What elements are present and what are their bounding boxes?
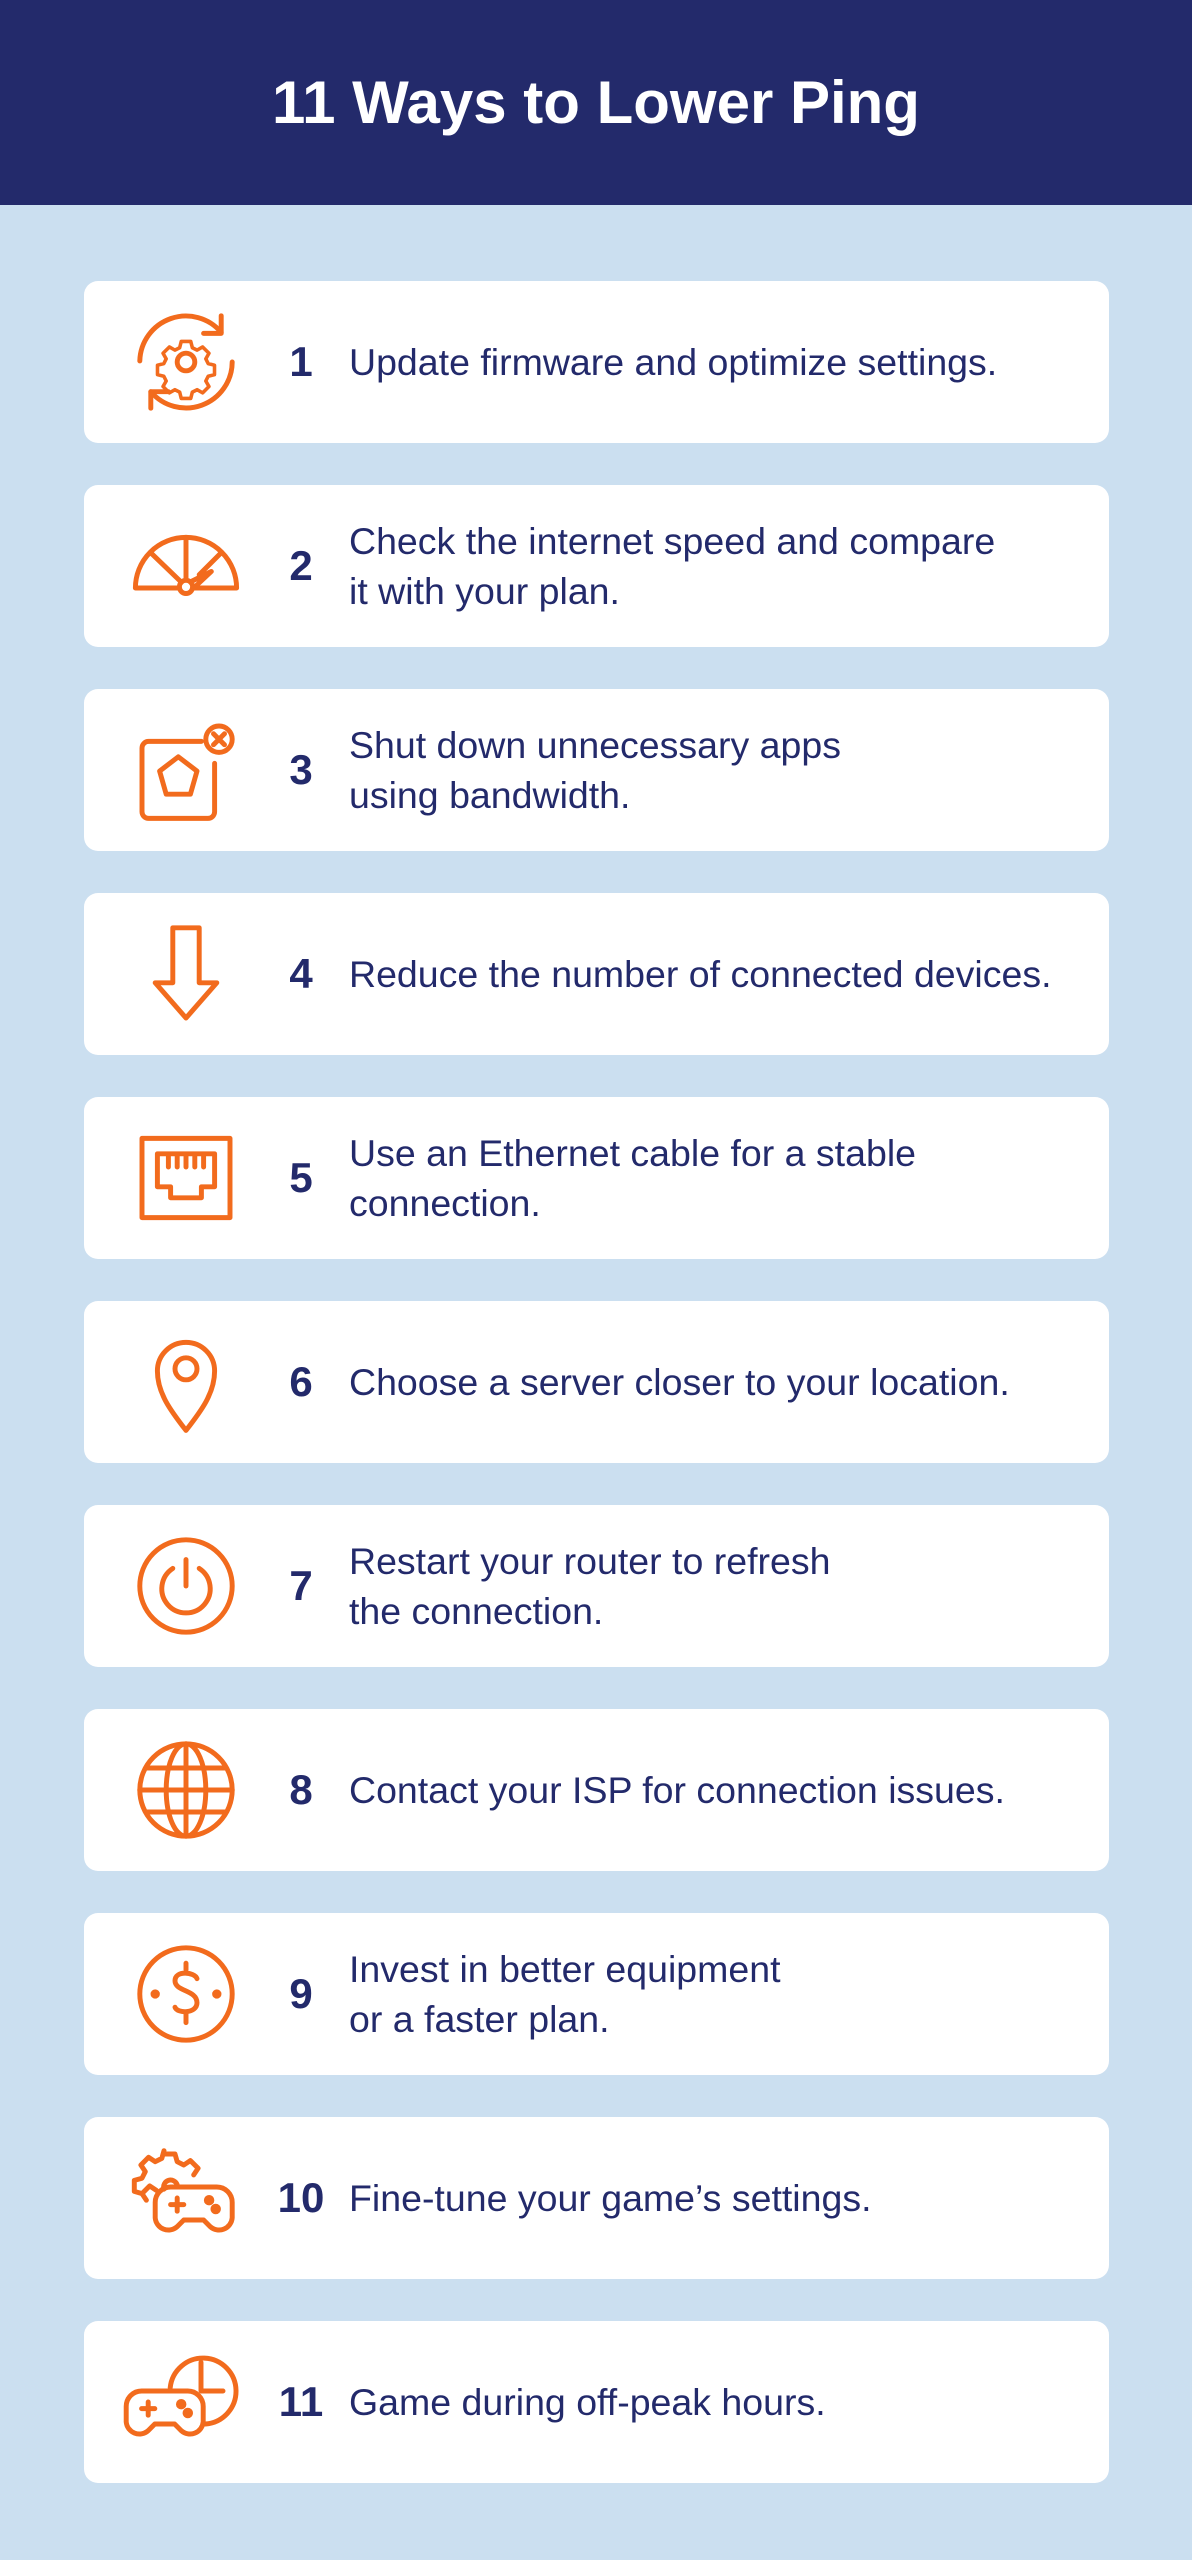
card 9	[84, 1913, 1109, 2075]
text: Update firmware and optimize settings.	[349, 341, 997, 383]
text: Use an Ethernet cable for a stable	[349, 1132, 916, 1174]
text: Restart your router to refresh	[349, 1540, 830, 1582]
icon: ethernet port	[140, 1136, 232, 1220]
text: or a faster plan.	[349, 1998, 610, 2040]
number: 8	[289, 1766, 313, 1813]
text	[349, 520, 995, 612]
card 1	[84, 281, 1109, 443]
card 2	[84, 485, 1109, 647]
card 7	[84, 1505, 1109, 1667]
number: 10	[278, 2174, 324, 2221]
text	[349, 1948, 781, 2040]
icon: globe	[137, 1741, 235, 1839]
text: Contact your ISP for connection issues.	[349, 1769, 1005, 1811]
text: Reduce the number of connected devices.	[349, 953, 1052, 995]
title: 11 Ways to Lower Ping	[272, 69, 920, 136]
text: Shut down unnecessary apps	[349, 724, 841, 766]
text: Check the internet speed and compare	[349, 520, 995, 562]
number: 11	[279, 2378, 323, 2425]
title	[0, 0, 1192, 205]
card 4	[84, 893, 1109, 1055]
text: connection.	[349, 1182, 541, 1224]
card 8	[84, 1709, 1109, 1871]
icon: dollar coin	[137, 1945, 235, 2043]
icon: power	[137, 1537, 235, 1635]
card 6	[84, 1301, 1109, 1463]
text: it with your plan.	[349, 570, 620, 612]
icon: app close	[140, 724, 235, 821]
text: Choose a server closer to your location.	[349, 1361, 1010, 1403]
icon: speedometer	[132, 534, 240, 596]
number: 1	[289, 338, 313, 385]
text	[349, 1132, 916, 1224]
icon: gear refresh	[137, 313, 235, 411]
number: 6	[289, 1358, 313, 1405]
number: 7	[289, 1562, 313, 1609]
icon: gear and controller	[132, 2148, 235, 2232]
text	[349, 724, 841, 816]
number: 5	[289, 1154, 313, 1201]
text: Fine-tune your game’s settings.	[349, 2177, 872, 2219]
number: 2	[289, 542, 313, 589]
number: 4	[289, 950, 313, 997]
icon: controller and clock	[124, 2356, 238, 2436]
card 3	[84, 689, 1109, 851]
icon: location pin	[154, 1340, 218, 1433]
text: Game during off-peak hours.	[349, 2381, 826, 2423]
number: 9	[289, 1970, 313, 2017]
card 11	[84, 2321, 1109, 2483]
text: the connection.	[349, 1590, 603, 1632]
icon: down arrow	[152, 925, 220, 1020]
text: Invest in better equipment	[349, 1948, 781, 1990]
card 10	[84, 2117, 1109, 2279]
number: 3	[289, 746, 313, 793]
text: using bandwidth.	[349, 774, 630, 816]
text	[349, 1540, 830, 1632]
card 5	[84, 1097, 1109, 1259]
